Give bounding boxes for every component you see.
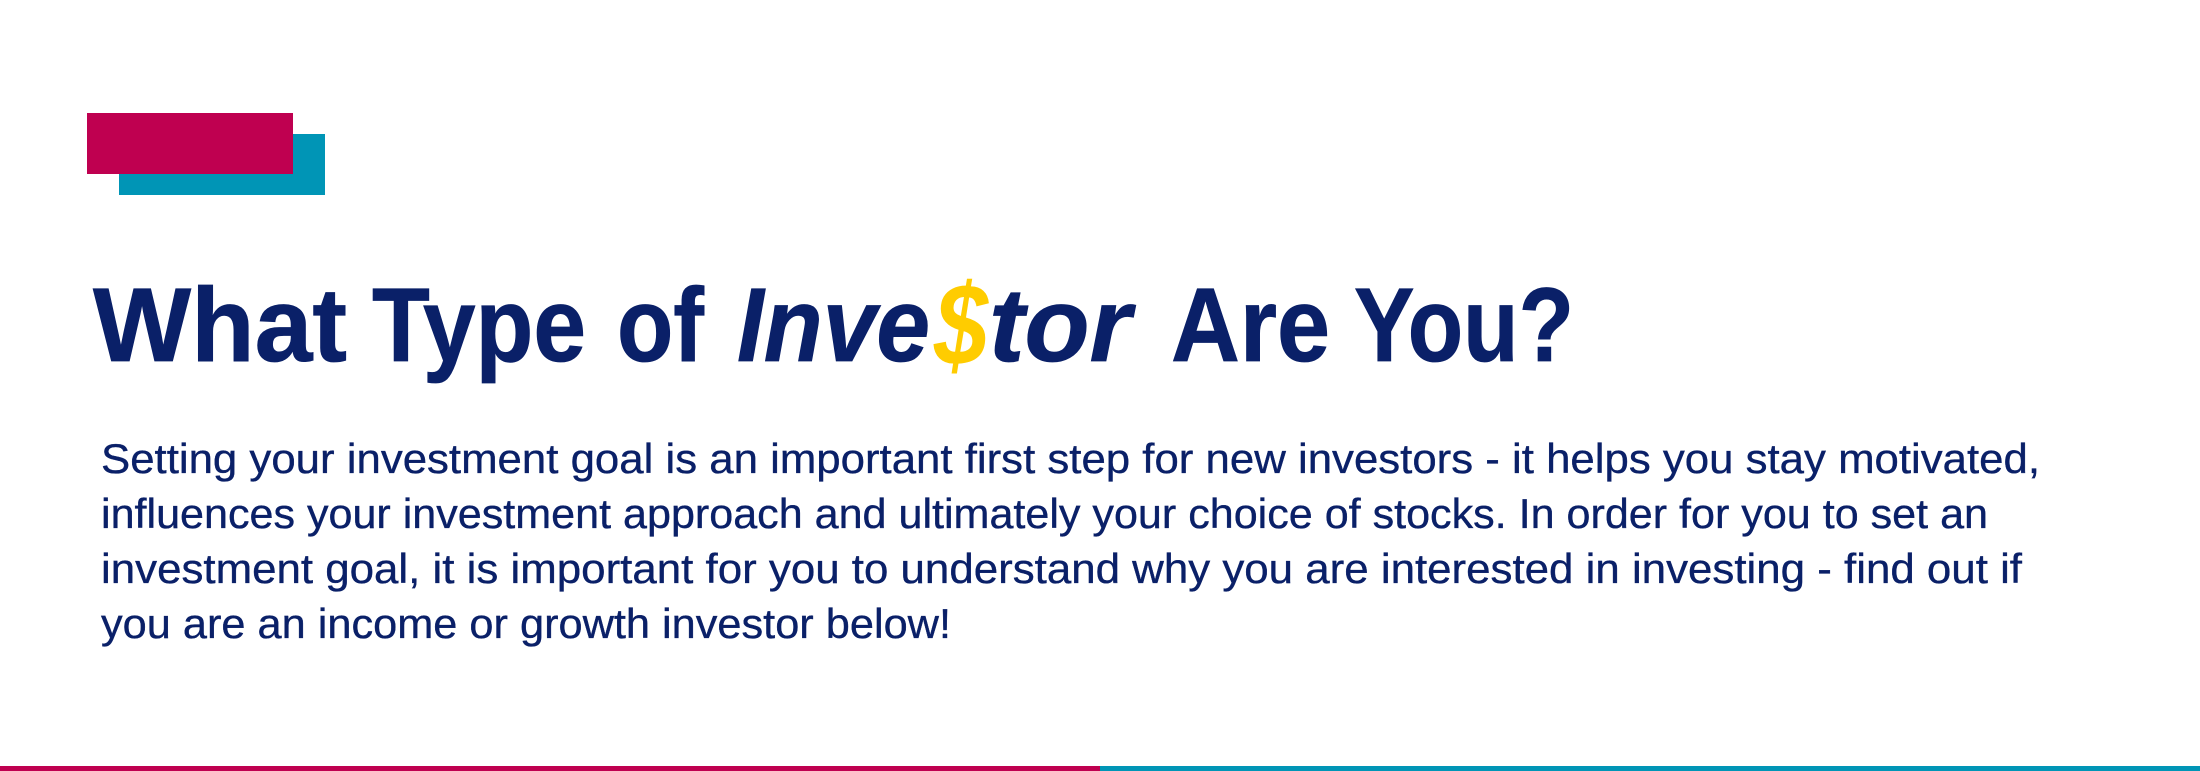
title: What [93,267,347,384]
title: Type [372,267,586,384]
title [93,260,1574,390]
title: You? [1354,267,1574,384]
title: Are [1171,267,1330,384]
footer colour bar [0,766,2200,771]
intro text block: investment goal, it is important for you to understand why you are interested in investing - find out if [101,545,2022,592]
title: Inve [737,267,930,384]
title: $ [933,260,989,390]
icon: overlapping brand rectangles [87,113,325,195]
intro text block: you are an income or growth investor below! [101,600,951,647]
title: of [617,267,705,384]
intro text block: Setting your investment goal is an important first step for new investors - it helps you stay motivated, [101,435,2040,482]
intro text block [101,435,2040,647]
title: tor [989,267,1136,384]
intro text block: influences your investment approach and ultimately your choice of stocks. In order for you to set an [101,490,1988,537]
